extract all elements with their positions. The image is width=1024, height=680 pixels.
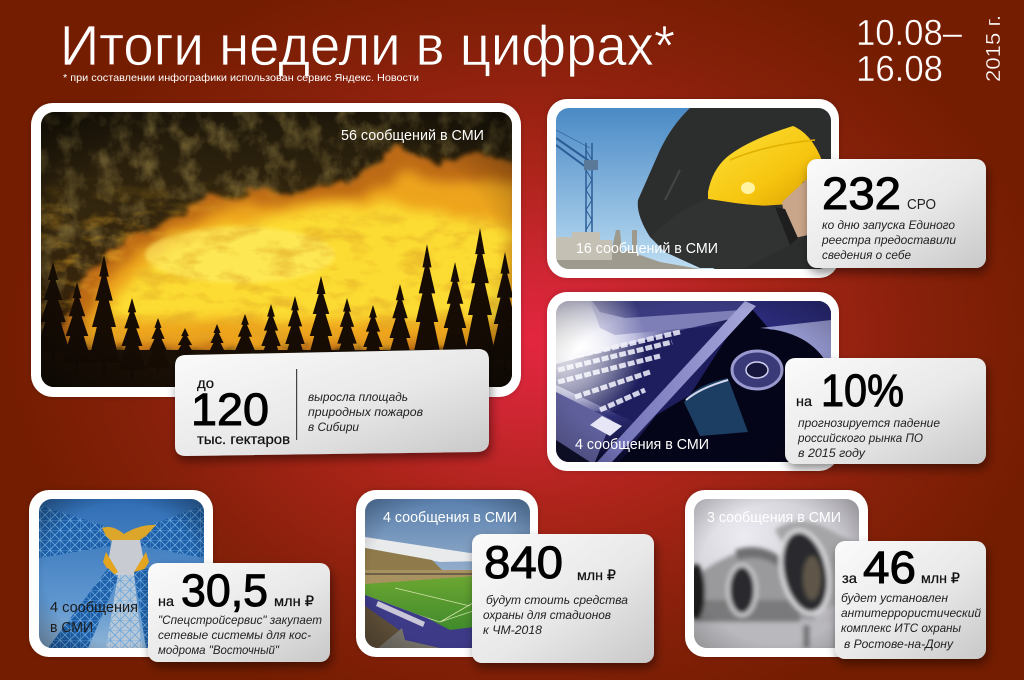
media count: 4 xyxy=(50,599,138,636)
callout: 232 SRO: 232 xyxy=(822,168,901,219)
callout: 232 SRO: сведения о себе xyxy=(822,248,911,262)
callout: 10 percent: 10% xyxy=(821,365,904,416)
media count: 4: 4 сообщения в СМИ xyxy=(575,436,709,453)
panel: forest fires xyxy=(31,103,521,456)
callout: 30.5 million roubles: сетевые системы для кос- xyxy=(158,628,311,642)
callout: 232 SRO xyxy=(807,159,986,268)
photo: stadium xyxy=(365,499,530,648)
photo frame: cameras xyxy=(685,490,868,657)
photo: launch gantry xyxy=(39,499,204,648)
callout: 30.5 million roubles: "Спецстройсервис" закупает xyxy=(158,613,322,627)
callout: 46 million roubles: за xyxy=(842,570,857,586)
callout: 840 million roubles: охраны для стадионов xyxy=(483,608,611,622)
photo frame: stadium xyxy=(356,490,538,657)
callout: 840 million roubles: будут стоить средства xyxy=(486,593,628,607)
callout: 232 SRO: ко дню запуска Единого xyxy=(822,218,955,232)
callout: 46 million roubles: антитеррористический xyxy=(841,606,981,620)
callout: 120 thousand hectares: в Сибири xyxy=(308,420,359,434)
panel: software market xyxy=(547,292,986,471)
panel: Vostochny cosmodrome xyxy=(29,490,330,662)
callout: 840 million roubles: к ЧМ-2018 xyxy=(483,623,542,637)
photo: burning forest xyxy=(36,112,520,390)
callout: 120 thousand hectares: выросла площадь xyxy=(308,390,408,404)
date range xyxy=(856,12,962,89)
media count: 56: 56 сообщений в СМИ xyxy=(341,127,484,144)
photo frame: gantry xyxy=(29,490,213,657)
callout: 120 thousand hectares xyxy=(175,349,489,456)
year label: 2015 г. xyxy=(983,15,1005,82)
callout: 46 million roubles: в Ростове-на-Дону xyxy=(844,637,954,651)
photo: builder with helmet xyxy=(556,108,831,269)
callout: 30.5 million roubles: модрома "Восточный" xyxy=(158,643,280,657)
photo: security cameras xyxy=(687,499,859,650)
photo frame: builder xyxy=(547,99,839,278)
callout: 30.5 million roubles: 30,5 xyxy=(181,565,268,616)
callout: 10 percent: на xyxy=(796,393,812,409)
media count: 16: 16 сообщений в СМИ xyxy=(576,240,718,257)
callout: 10 percent: прогнозируется падение xyxy=(798,416,940,430)
date range: 16.08 xyxy=(856,48,943,89)
callout: 840 million roubles: 840 xyxy=(484,537,563,588)
title: Итоги недели в цифрах* xyxy=(60,14,675,78)
callout: 840 million roubles: млн ₽ xyxy=(577,567,616,583)
date range: 10.08– xyxy=(856,12,962,53)
callout: 10 percent: в 2015 году xyxy=(798,446,866,460)
media count: 4: в СМИ xyxy=(50,619,93,636)
callout: 120 thousand hectares: до xyxy=(197,375,214,391)
callout: 46 million roubles: комплекс ИТС охраны xyxy=(841,621,961,635)
callout: 46 million roubles: млн ₽ xyxy=(921,570,960,586)
callout: 840 million roubles xyxy=(472,534,654,663)
photo frame: fire xyxy=(31,103,521,397)
media count: 4: 4 сообщения в СМИ xyxy=(383,509,517,526)
callout: 30.5 million roubles xyxy=(148,563,330,662)
callout: 46 million roubles xyxy=(835,541,986,659)
photo frame: laptop xyxy=(547,292,839,471)
callout: 30.5 million roubles: млн ₽ xyxy=(274,593,314,609)
callout: 30.5 million roubles: на xyxy=(158,593,174,609)
footnote: * при составлении инфографики использован сервис Яндекс. Новости xyxy=(63,72,419,84)
panel: self-regulating organisations xyxy=(547,99,986,278)
callout: 10 percent: российского рынка ПО xyxy=(797,431,923,445)
media count: 3: 3 сообщения в СМИ xyxy=(707,509,841,526)
photo: laptop and disc xyxy=(556,301,831,462)
panel: stadium security xyxy=(356,490,654,663)
callout: 232 SRO: СРО xyxy=(907,196,936,213)
callout: 46 million roubles: будет установлен xyxy=(841,591,948,605)
callout: 120 thousand hectares: 120 xyxy=(191,384,269,435)
callout: 10 percent xyxy=(785,358,986,464)
callout: 120 thousand hectares: тыс. гектаров xyxy=(197,431,290,447)
callout: 120 thousand hectares: природных пожаров xyxy=(308,405,423,419)
callout: 232 SRO: реестра предоставили xyxy=(821,233,956,247)
media count: 4: 4 сообщения xyxy=(50,599,138,616)
panel: anti-terror complex xyxy=(685,490,986,659)
callout: 46 million roubles: 46 xyxy=(863,542,916,593)
